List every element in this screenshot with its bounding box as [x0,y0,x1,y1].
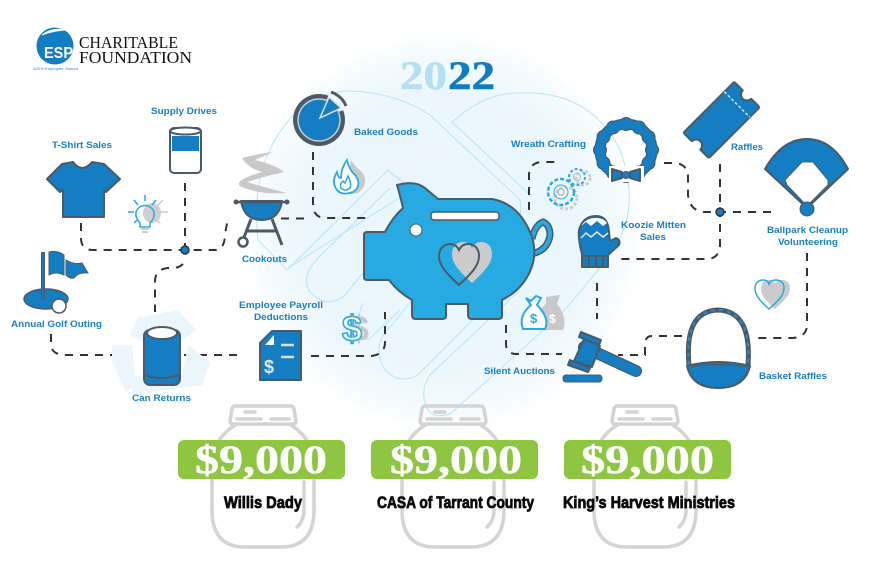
label line 1: Employee Payroll [239,300,323,311]
label: Annual Golf Outing: Annual Golf Outing [11,319,102,330]
icon: gavel [563,332,636,382]
amount badge [564,440,731,479]
background glow with pale outlines [243,32,643,432]
jar outline [402,406,504,547]
icon: ballpark [765,139,848,216]
icon: food can [170,128,201,173]
heart outline [439,244,479,285]
heart shadow [452,242,492,283]
logo wordmark line 2: FOUNDATION [79,48,192,67]
icon: gears [548,169,590,209]
label: Employee Payroll Deductions [239,300,323,323]
label: Can Returns: Can Returns [132,393,191,404]
label line 1: Koozie Mitten [621,220,686,231]
icon: smoke [239,152,287,193]
logo circle [36,28,74,64]
label: Ballpark Cleanup Volunteering [767,225,848,248]
icon: money bags: $ [530,311,538,326]
label line 2: Sales [640,232,666,243]
donation jar: King's Harvest Ministries [563,406,735,547]
dashed connector paths [51,152,807,356]
amount badge [371,440,538,479]
logo wordmark line 1: CHARITABLE [79,33,178,52]
icon: grill [234,200,290,246]
jar outline [594,406,696,547]
year light digits: 20 [400,53,447,98]
icon: soda can [144,327,180,385]
piggy bank [364,183,550,319]
pig body [364,183,534,319]
donation jar: Willis Dady [178,406,345,547]
logo: ESP Charitable Foundation [33,28,192,71]
icon: dollar sign: $ [342,308,362,349]
label: Wreath Crafting: Wreath Crafting [511,139,586,150]
icon: golf flag [24,251,88,313]
icon: mitten [579,216,620,267]
amount: $9,000 [195,437,327,482]
pig eye [410,224,422,236]
label: Supply Drives: Supply Drives [151,106,217,117]
icon: dollar sign: $ [349,308,369,349]
label: Baked Goods: Baked Goods [354,127,418,138]
icon: pie [293,91,350,146]
year title [400,53,495,98]
recipient name: CASA of Tarrant County [377,493,534,512]
icon: basket [687,310,750,388]
donation jar: CASA of Tarrant County [371,406,538,547]
icon: t-shirt [47,162,120,217]
icon: heart [755,280,790,309]
label line 2: Deductions [254,312,308,323]
label: Raffles: Raffles [731,142,763,153]
label: Cookouts: Cookouts [242,254,287,265]
recipient name: King’s Harvest Ministries [563,493,735,512]
pig tail [532,222,550,254]
amount badge [178,440,345,479]
icon: light bulb [128,195,168,232]
label: T-Shirt Sales: T-Shirt Sales [52,140,112,151]
logo tagline: 100% Employee Owned [33,67,78,71]
coin slot [431,212,499,220]
icon: raffle ticket [683,82,760,158]
label: Koozie Mitten Sales [621,220,686,243]
recipient name: Willis Dady [224,493,302,512]
year dark digits: 22 [448,53,495,98]
icon: money bags [522,295,565,330]
amount: $9,000 [390,437,522,482]
label: Basket Raffles: Basket Raffles [759,371,827,382]
label: Silent Auctions: Silent Auctions [484,366,555,377]
icon: payroll document: $ [264,357,274,377]
jar outline [212,406,314,547]
icon: payroll document [260,331,301,380]
label line 1: Ballpark Cleanup [767,225,848,236]
icon: money bags: $ [549,312,556,326]
icon: recycle symbol [112,310,210,395]
logo circle: ESP [44,45,73,62]
amount: $9,000 [581,437,714,482]
icon: flame [334,160,365,194]
label line 2: Volunteering [778,237,838,248]
icon: wreath [600,124,652,182]
